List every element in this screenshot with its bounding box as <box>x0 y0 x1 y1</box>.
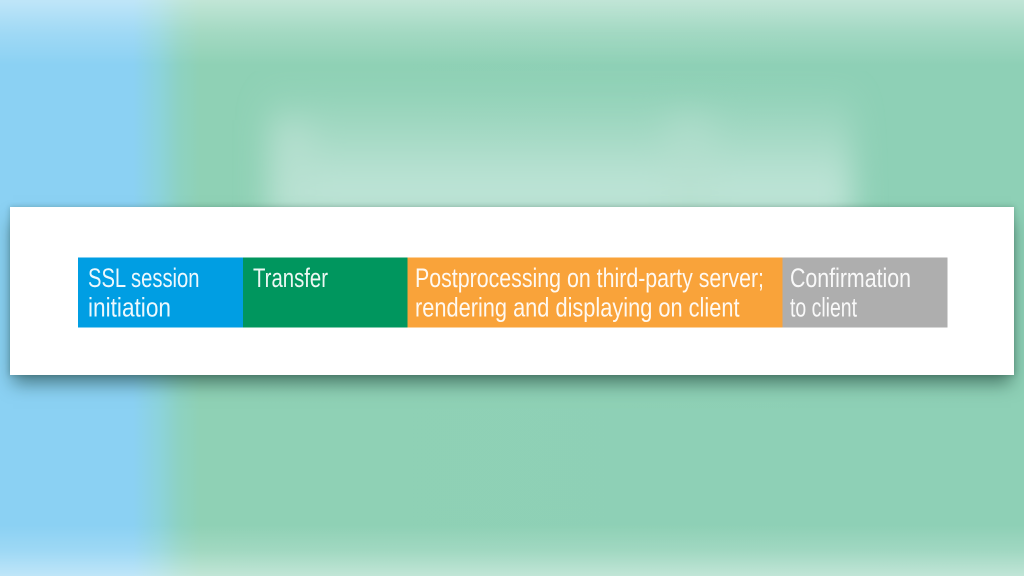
segment: SSL session initiation <box>78 258 243 328</box>
segment: Postprocessing and rendering <box>408 258 782 328</box>
segment: Postprocessing and rendering: Postprocessing on third-party server; <box>415 263 764 293</box>
segment: Confirmation to client: to client <box>790 292 857 322</box>
segment: Transfer <box>243 258 408 328</box>
segment: SSL session initiation: initiation <box>88 292 171 322</box>
segment: SSL session initiation: SSL session <box>88 263 200 293</box>
segment: Transfer: Transfer <box>253 263 328 293</box>
segment: Confirmation to client <box>782 258 948 328</box>
segment: Postprocessing and rendering: rendering and displaying on client <box>415 292 740 322</box>
panel: white card <box>10 207 1014 375</box>
segment: Confirmation to client: Confirmation <box>790 263 911 293</box>
